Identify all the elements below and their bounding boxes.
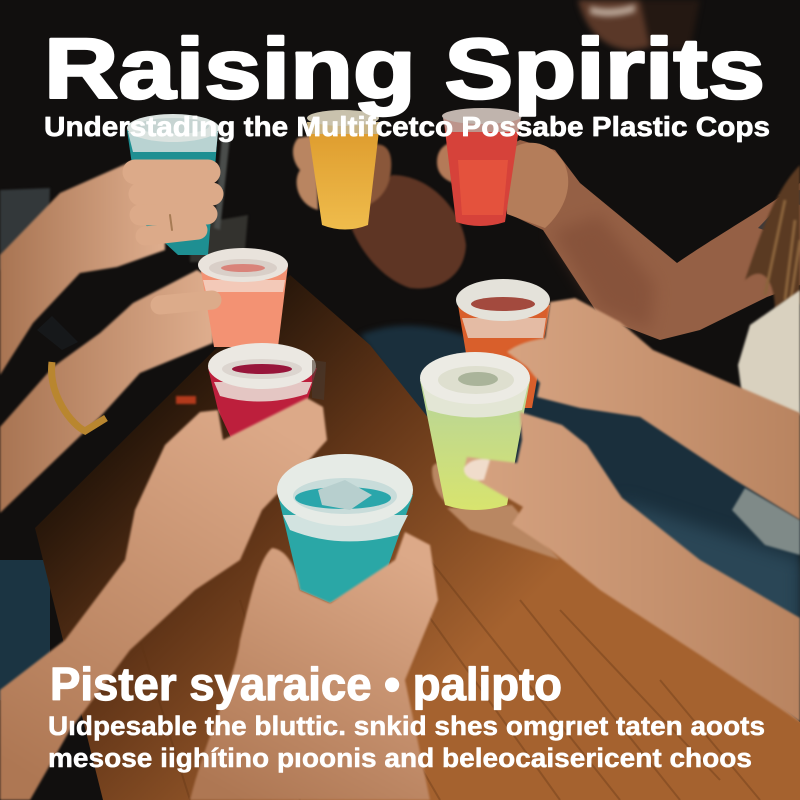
lower body text: Uıdpesable the bluttic. snkid shes omgrıet taten aoots (48, 711, 765, 741)
subtitle: Understading the Multifcetco Possabe Plastic Cops (44, 111, 770, 142)
cup: teal top left (127, 114, 219, 255)
hand holding peach cup (0, 270, 215, 513)
cup: lime (420, 352, 530, 510)
cup: orange (456, 279, 550, 408)
cup: teal front (277, 454, 413, 603)
blurred face of person at top right (578, 0, 700, 50)
cup: peach (198, 248, 288, 347)
hand holding orange cup (507, 298, 800, 520)
hands behind the amber cup (293, 135, 391, 210)
fingers over the teal cup (135, 172, 212, 236)
wooden table (35, 275, 800, 800)
gold bracelet (52, 362, 106, 431)
lower body text (48, 711, 765, 773)
watch band on wrist (37, 316, 78, 350)
long hair at right (745, 165, 800, 310)
thumb on peach cup (160, 300, 212, 305)
man's left arm (345, 175, 466, 289)
cup: red (442, 108, 522, 226)
cup: crimson (208, 343, 317, 440)
lower heading: Pister syaraice • palipto (50, 658, 562, 710)
man's right arm, tattooed (500, 140, 800, 340)
glass behind crimson cup (312, 360, 326, 400)
title: Raising Spirits (44, 22, 765, 117)
hand holding front teal cup (190, 532, 438, 800)
left hand arm holding teal cup (0, 162, 165, 375)
white blouse at right (732, 290, 800, 555)
cup: amber (307, 110, 380, 230)
lower body text: mesose iighítino pıoonis and beleocaisericent choos (48, 743, 752, 773)
blurred glass and straw behind the hands (0, 135, 248, 404)
hand holding lime cup with forearm (464, 412, 800, 722)
hand holding crimson cup, arm from bottom left (0, 398, 327, 800)
fingers behind the lime cup (432, 463, 560, 560)
fingers behind the red cup (437, 142, 462, 185)
